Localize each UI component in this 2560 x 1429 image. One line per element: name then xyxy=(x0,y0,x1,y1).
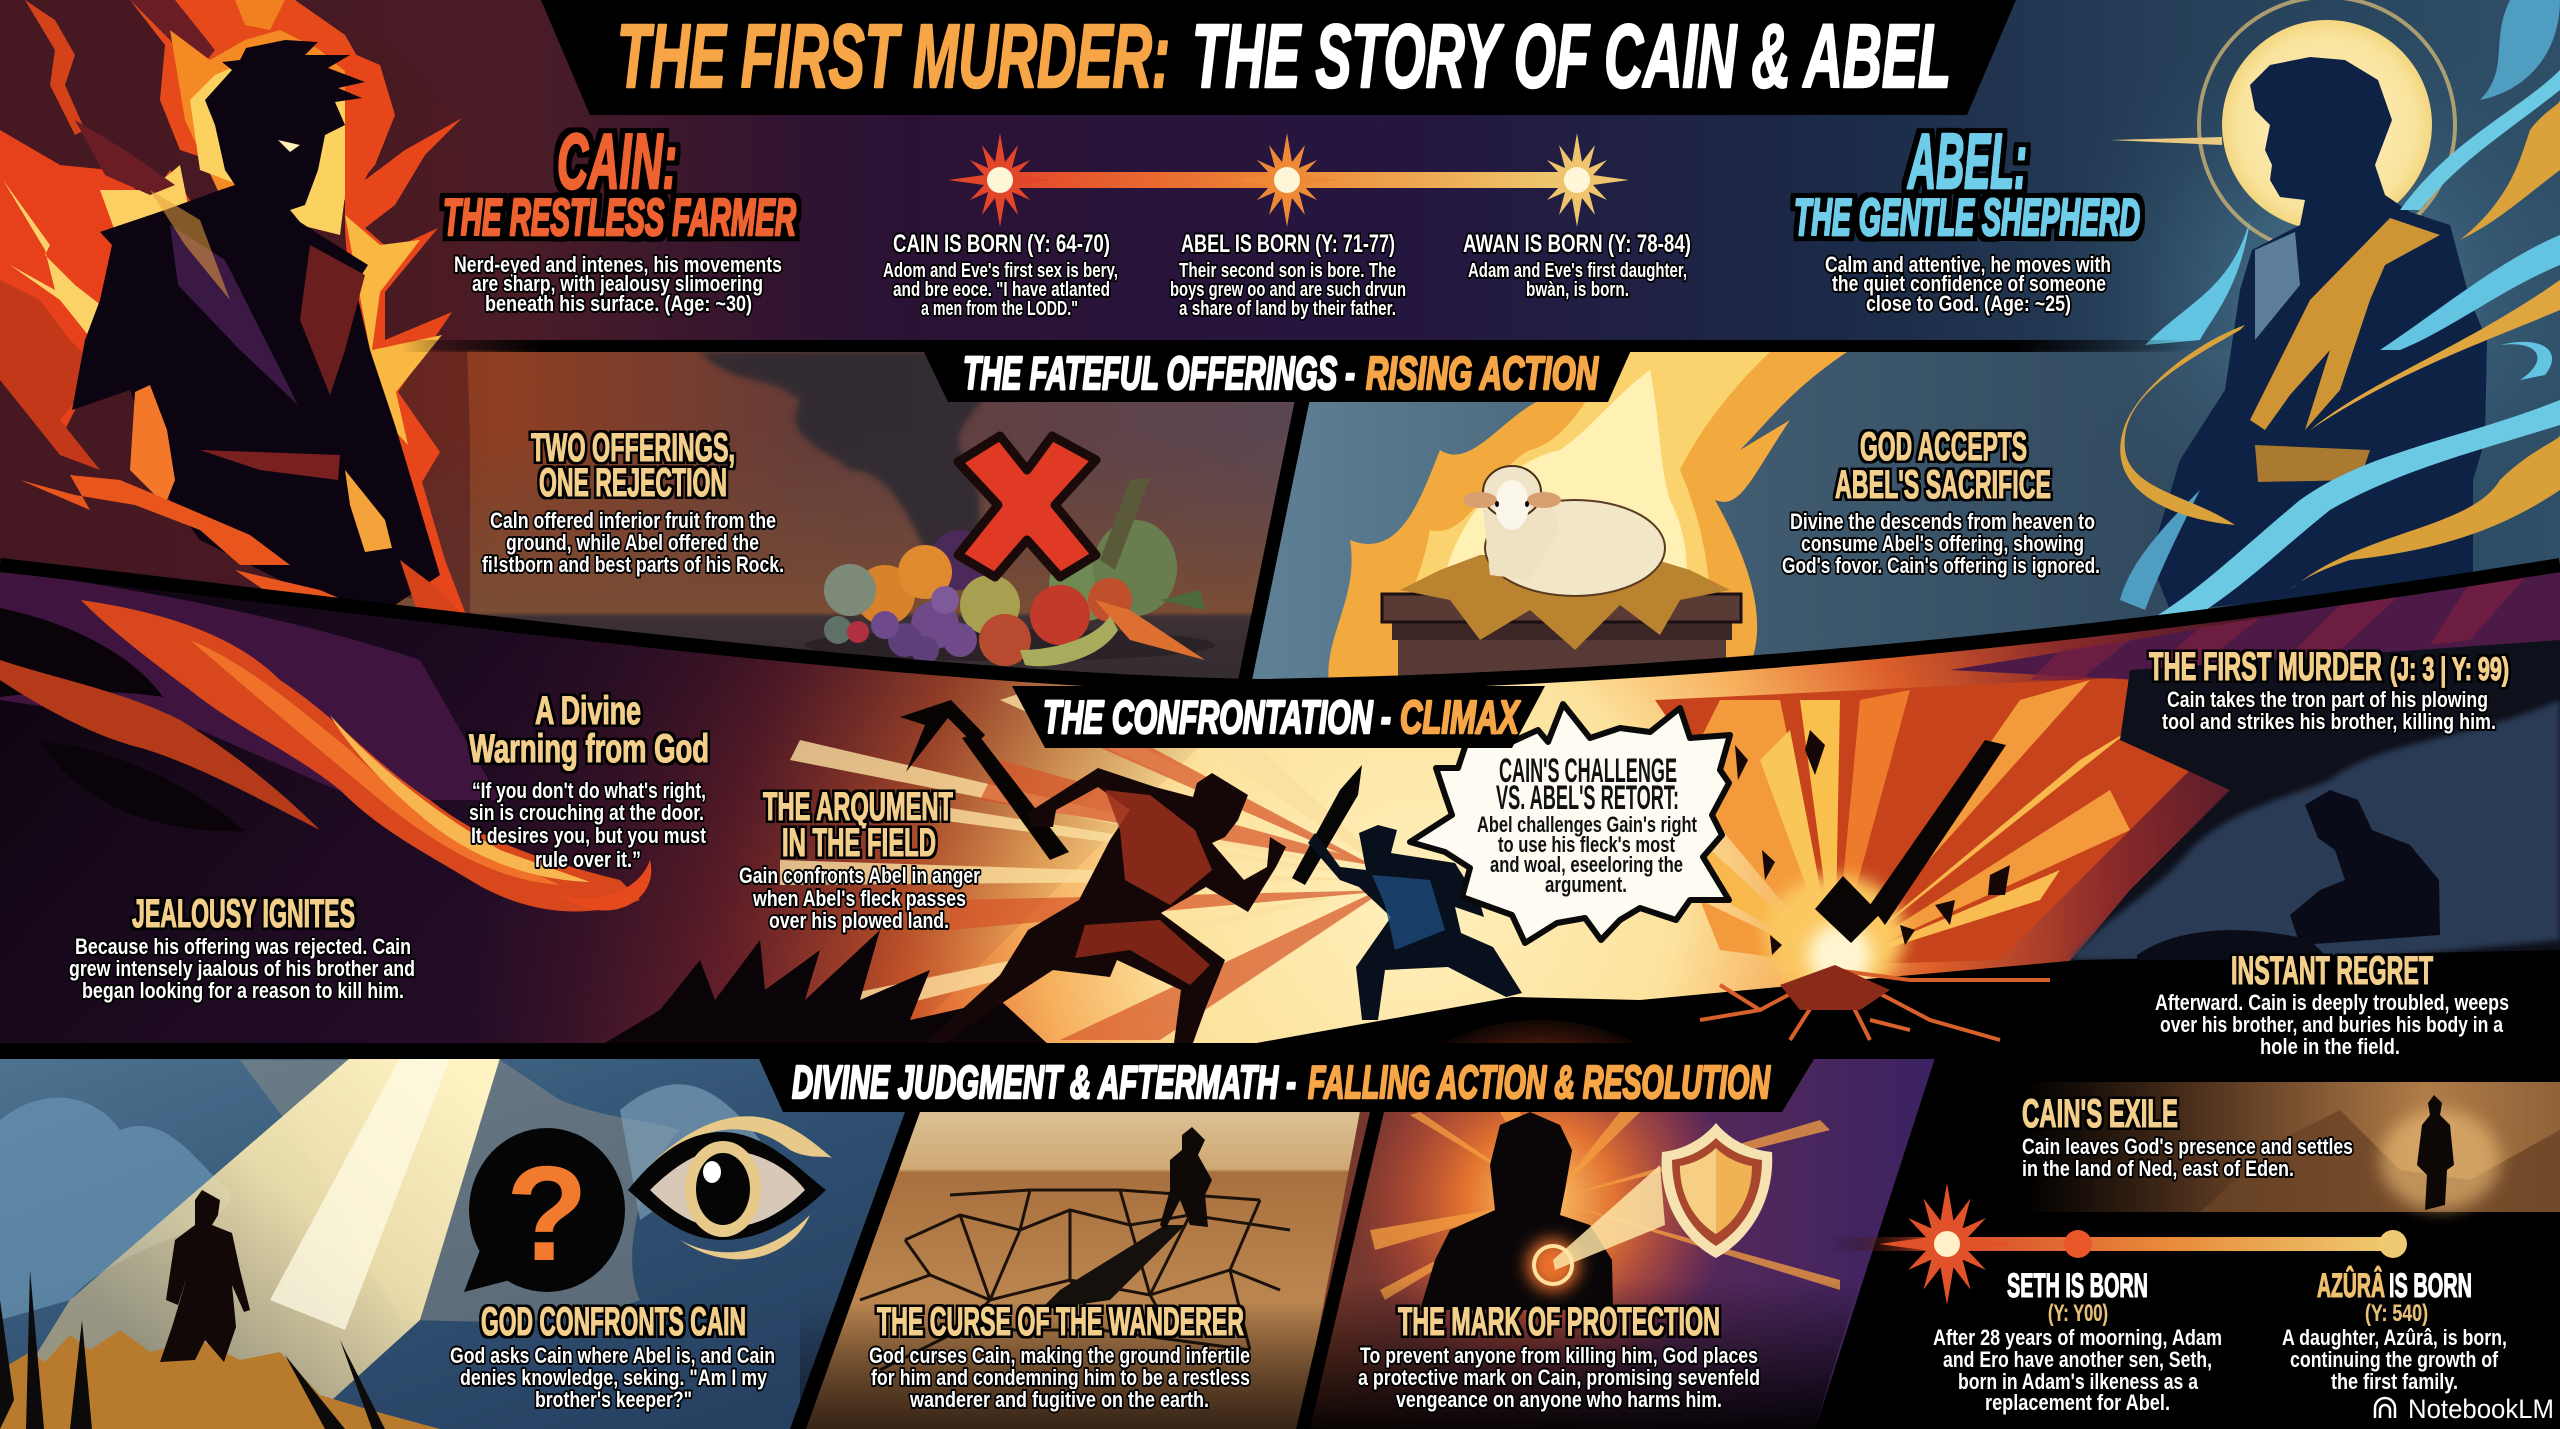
blue wisps xyxy=(2145,220,2250,345)
bottom band xyxy=(0,1043,2560,1059)
body xyxy=(2150,57,2487,610)
panel: mark of protection xyxy=(1296,1020,1935,1429)
text: divine warning: rule over it.” xyxy=(535,847,641,872)
text: curse of the wanderer: wanderer and fugitive on the earth. xyxy=(909,1387,1209,1412)
flames right xyxy=(345,50,470,625)
text: God accepts xyxy=(1782,425,2100,578)
star: Abel born xyxy=(1235,133,1339,227)
grass xyxy=(0,1330,440,1429)
section heading: divine judgment: FALLING ACTION & RESOLUTION xyxy=(1308,1056,1770,1108)
figure: Cain silhouette in flames xyxy=(0,0,470,625)
Abel heading and description: THE GENTLE SHEPHERD xyxy=(1794,189,2140,247)
text: Azura born xyxy=(2282,1266,2507,1394)
Abel born text xyxy=(1170,230,1406,320)
text: curse of the wanderer: God curses Cain, making the ground infertile xyxy=(869,1343,1250,1368)
speed rays xyxy=(780,690,1400,1015)
title banner: THE STORY OF CAIN & ABEL xyxy=(1192,7,1951,107)
Cain born text: CAIN IS BORN (Y: 64-70) xyxy=(893,230,1110,258)
text: God confronts Cain: God asks Cain where Abel is, and Cain xyxy=(450,1343,775,1368)
text: Cain's exile: CAIN'S EXILE xyxy=(2022,1092,2178,1136)
dot: Seth xyxy=(2064,1230,2092,1258)
Awan born text xyxy=(1463,230,1691,301)
text: jealousy ignites xyxy=(69,892,415,1003)
text: God confronts Cain: brother's keeper?" xyxy=(535,1387,692,1412)
icon: red X rejection xyxy=(958,436,1096,577)
speech burst text: VS. ABEL'S RETORT: xyxy=(1496,779,1679,817)
Cain heading and description: are sharp, with jealousy slimoering xyxy=(472,271,763,296)
icon: question bubble: ? xyxy=(506,1138,588,1289)
text: Seth born xyxy=(1933,1267,2222,1415)
text: Azura born: (Y: 540) xyxy=(2365,1300,2428,1327)
text: Azura born: the first family. xyxy=(2331,1369,2458,1394)
text: divine warning xyxy=(469,689,709,872)
flying debris xyxy=(1735,730,2010,955)
text: argument in the field: THE ARQUMENT xyxy=(763,785,953,829)
text: divine warning: Warning from God xyxy=(469,727,709,771)
NotebookLM brand mark: NotebookLM xyxy=(2408,1394,2554,1424)
panel: curse of the wanderer xyxy=(800,1112,1376,1429)
Awan born text: Adam and Eve's first daughter, xyxy=(1468,260,1687,282)
clouds xyxy=(2070,700,2560,965)
nest straw xyxy=(1400,555,1730,650)
dot: Azura xyxy=(2379,1230,2407,1258)
gold sash xyxy=(2250,218,2440,430)
text: God confronts Cain: GOD CONFRONTS CAIN xyxy=(481,1300,746,1344)
text: curse of the wanderer: for him and condemning him to be a restless xyxy=(871,1365,1250,1390)
text: instant regret xyxy=(2155,949,2509,1059)
panel: offering accepted xyxy=(1246,350,2300,692)
text: divine warning: “If you don't do what's right, xyxy=(472,778,706,803)
text: two offerings: ground, while Abel offered the xyxy=(506,530,759,555)
light to shield xyxy=(1553,1165,1665,1270)
text: Seth born: and Ero have another sen, Seth, xyxy=(1943,1347,2212,1372)
text: Seth born: (Y: Y00) xyxy=(2048,1300,2108,1327)
text: God accepts: GOD ACCEPTS xyxy=(1860,425,2027,469)
Awan born text: bwàn, is born. xyxy=(1526,279,1629,301)
flames left xyxy=(0,130,200,440)
Cain born text: and bre eoce. "I have atlanted xyxy=(893,279,1110,301)
text: God accepts: God's fovor. Cain's offering is ignored. xyxy=(1782,553,2100,578)
text: two offerings xyxy=(482,426,784,577)
fire xyxy=(1328,350,1850,690)
flame swirl xyxy=(0,600,651,911)
grass xyxy=(600,930,1050,1046)
text: two offerings: TWO OFFERINGS, xyxy=(531,426,735,470)
Cain heading and description: beneath his surface. (Age: ~30) xyxy=(485,291,752,316)
icon: all-seeing eye xyxy=(628,1116,832,1259)
black smoke blobs xyxy=(0,608,245,831)
Cain born text: a men from the LODD." xyxy=(921,298,1078,320)
panel: God confronts Cain xyxy=(0,1058,1000,1429)
section heading: fateful offerings: RISING ACTION xyxy=(1366,347,1599,399)
star: Awan born xyxy=(1525,133,1629,227)
altar xyxy=(1382,594,1741,692)
top band background xyxy=(0,0,2560,700)
section heading: fateful offerings: THE FATEFUL OFFERINGS - xyxy=(963,347,1355,399)
brother's burial mound xyxy=(2137,930,2330,960)
text: Cain's exile xyxy=(2022,1092,2353,1181)
text: two offerings: ONE REJECTION xyxy=(539,461,727,505)
speech burst text: argument. xyxy=(1545,872,1627,897)
text: jealousy ignites: began looking for a reason to kill him. xyxy=(82,978,404,1003)
purple shroud xyxy=(0,570,500,800)
text: divine warning: A Divine xyxy=(535,689,641,733)
text: first murder xyxy=(2149,645,2509,734)
text: argument in the field xyxy=(739,785,980,933)
Abel born text: ABEL IS BORN (Y: 71-77) xyxy=(1181,230,1395,258)
explosion xyxy=(1655,672,2240,995)
section heading: confrontation: THE CONFRONTATION - xyxy=(1043,691,1391,743)
divider curse right xyxy=(1296,1112,1384,1429)
body silhouette xyxy=(72,40,440,612)
text: Seth born: replacement for Abel. xyxy=(1985,1390,2170,1415)
gold wisps xyxy=(2120,325,2245,525)
text: divine warning: sin is crouching at the door. xyxy=(469,800,704,825)
Abel heading and description: close to God. (Age: ~25) xyxy=(1866,291,2071,316)
text: first murder: THE FIRST MURDER xyxy=(2149,645,2382,689)
text: curse of the wanderer xyxy=(869,1300,1250,1412)
black section strip xyxy=(400,340,2190,352)
glowing mark xyxy=(1527,1239,1579,1291)
icon: shield xyxy=(1662,1123,1772,1258)
figure: Abel defending with staff xyxy=(1292,765,1522,1020)
panel: Cain's exile scene xyxy=(2023,1082,2560,1212)
yellow streak xyxy=(3,180,215,432)
Cain born text xyxy=(883,230,1118,320)
text: argument in the field: Gain confronts Abel in anger xyxy=(739,863,980,888)
lava cracks xyxy=(1700,970,2050,1040)
text: mark of protection xyxy=(1358,1300,1760,1412)
star: Cain born xyxy=(948,133,1052,227)
Abel heading and description: Calm and attentive, he moves with xyxy=(1825,252,2111,277)
Cain heading and description: THE RESTLESS FARMER xyxy=(443,189,796,247)
text: God accepts: consume Abel's offering, showing xyxy=(1801,531,2084,556)
section heading: divine judgment: DIVINE JUDGMENT & AFTERMATH - xyxy=(792,1056,1296,1108)
lamb xyxy=(1463,466,1665,596)
section heading: divine judgment xyxy=(759,1056,1814,1112)
divider offerings xyxy=(1236,350,1320,690)
text: Seth born: SETH IS BORN xyxy=(2007,1267,2148,1305)
text: instant regret: hole in the field. xyxy=(2260,1034,2400,1059)
wanderer shadow xyxy=(1040,1225,1185,1310)
Abel born text: boys grew oo and are such drvun xyxy=(1170,279,1406,301)
right dark zone xyxy=(1990,640,2560,1045)
Cain heading and description: CAIN: xyxy=(557,117,677,205)
speech burst text: to use his fleck's most xyxy=(1498,832,1675,857)
text: God accepts: Divine the descends from heaven to xyxy=(1790,509,2095,534)
speech burst text: Abel challenges Gain's right xyxy=(1477,812,1697,837)
black ground xyxy=(1240,950,2560,1046)
text: Azura born: continuing the growth of xyxy=(2290,1347,2499,1372)
text: first murder: Cain takes the tron part of his plowing xyxy=(2167,687,2488,712)
text: Azura born: IS BORN xyxy=(2389,1267,2472,1305)
text: divine warning: It desires you, but you must xyxy=(471,823,707,848)
crying figure xyxy=(2290,790,2440,945)
text: God accepts: ABEL'S SACRIFICE xyxy=(1835,463,2051,507)
hoe in ground xyxy=(1815,740,2006,943)
smoke xyxy=(700,352,1000,560)
purple stripes top right xyxy=(1950,565,2560,680)
text: curse of the wanderer: THE CURSE OF THE WANDERER xyxy=(877,1300,1244,1344)
diagonal divider band xyxy=(0,565,2560,686)
title banner xyxy=(541,0,2016,115)
text: jealousy ignites: grew intensely jaalous of his brother and xyxy=(69,956,415,981)
speech burst text xyxy=(1477,752,1697,897)
speech burst text: CAIN'S CHALLENGE xyxy=(1499,752,1677,790)
speech burst xyxy=(1410,704,1730,943)
text: argument in the field: IN THE FIELD xyxy=(782,821,936,865)
text: Azura born: A daughter, Azûrâ, is born, xyxy=(2282,1325,2507,1350)
text: argument in the field: when Abel's fleck passes xyxy=(752,886,966,911)
Cain heading and description: Nerd-eyed and intenes, his movements xyxy=(454,252,782,277)
Abel heading and description xyxy=(1794,117,2140,316)
exile figure xyxy=(2417,1095,2454,1210)
section heading: confrontation: CLIMAX xyxy=(1400,691,1521,743)
text: Cain's exile: Cain leaves God's presence and settles xyxy=(2022,1134,2353,1159)
text: God confronts Cain xyxy=(450,1300,775,1412)
figure: Cain attacking with hoe xyxy=(900,700,1286,1043)
text: mark of protection: To prevent anyone from killing him, God places xyxy=(1360,1343,1758,1368)
Abel heading and description: the quiet confidence of someone xyxy=(1832,271,2106,296)
text: jealousy ignites: Because his offering was rejected. Cain xyxy=(75,934,411,959)
silhouette xyxy=(1420,1112,1613,1310)
figure: Cain under light xyxy=(160,1190,250,1362)
icon: question bubble xyxy=(464,1128,625,1292)
text: two offerings: Caln offered inferior fruit from the xyxy=(490,508,776,533)
star: Seth xyxy=(1879,1183,2015,1305)
text: argument in the field: over his plowed land. xyxy=(769,908,949,933)
flames top xyxy=(130,0,395,200)
timeline: later children xyxy=(1830,1183,2407,1305)
torso shading xyxy=(170,225,298,405)
text: Seth born: born in Adam's ilkeness as a xyxy=(1958,1369,2199,1394)
text: jealousy ignites: JEALOUSY IGNITES xyxy=(132,892,355,936)
text: God confronts Cain: denies knowledge, seking. "Am I my xyxy=(460,1365,768,1390)
figure: Abel silhouette with halo xyxy=(2040,0,2560,620)
divider curse left xyxy=(790,1112,920,1429)
Abel born text: Their second son is bore. The xyxy=(1179,260,1396,282)
Cain born text: Adom and Eve's first sex is bery, xyxy=(883,260,1118,282)
text: mark of protection: THE MARK OF PROTECTION xyxy=(1398,1300,1720,1344)
text: Seth born: After 28 years of moorning, Adam xyxy=(1933,1325,2222,1350)
Cain heading and description xyxy=(443,117,796,316)
wanderer figure xyxy=(1160,1127,1212,1230)
text: mark of protection: vengeance on anyone who harms him. xyxy=(1396,1387,1722,1412)
text: two offerings: fi!stborn and best parts of his Rock. xyxy=(482,552,784,577)
light beam xyxy=(0,1058,500,1429)
text: mark of protection: a protective mark on Cain, promising sevenfeld xyxy=(1358,1365,1760,1390)
speech burst text: and woal, eseeloring the xyxy=(1490,852,1683,877)
text: first murder: tool and strikes his brother, killing him. xyxy=(2162,709,2496,734)
title banner: THE FIRST MURDER: xyxy=(617,7,1170,107)
fruit pile xyxy=(805,478,1215,666)
cracked earth xyxy=(860,1190,1290,1370)
text: Azura born: AZÛRÂ xyxy=(2317,1266,2385,1305)
rays xyxy=(1370,1112,1840,1300)
tunic xyxy=(2255,232,2300,340)
panel: confrontation background xyxy=(0,565,2560,1046)
Abel born text: a share of land by their father. xyxy=(1179,298,1396,320)
timeline: births of first children xyxy=(883,133,1691,320)
text: Cain's exile: in the land of Ned, east of Eden. xyxy=(2022,1156,2294,1181)
panel: offering rejected xyxy=(300,350,1312,690)
Awan born text: AWAN IS BORN (Y: 78-84) xyxy=(1463,230,1691,258)
clouds xyxy=(0,1098,231,1320)
Abel heading and description: ABEL: xyxy=(1907,117,2027,205)
flames over body xyxy=(130,385,175,505)
